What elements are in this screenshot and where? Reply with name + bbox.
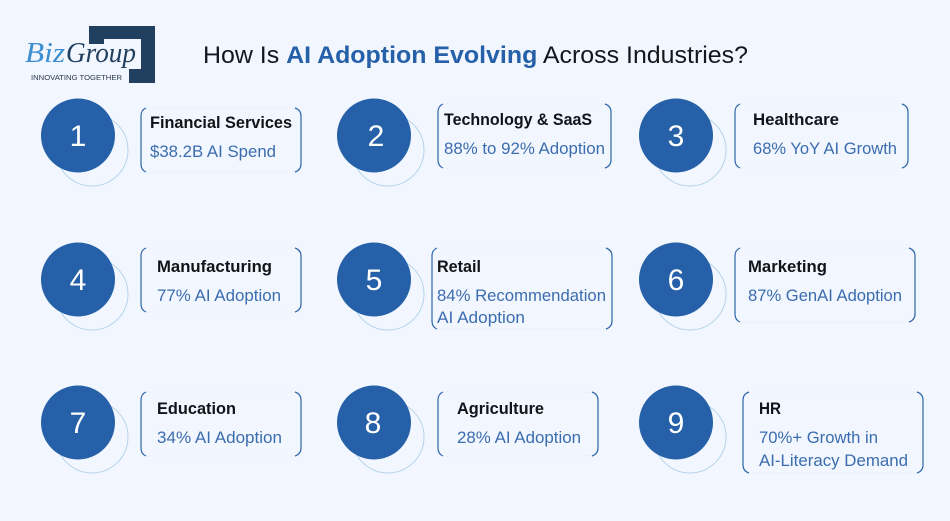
item 9: HR	[639, 386, 923, 473]
item 5: Retail: AI Adoption	[437, 309, 525, 327]
item 3: Healthcare: Healthcare	[753, 111, 839, 129]
item 1: Financial Services: 1	[70, 120, 86, 153]
logo: BizGroup	[25, 26, 155, 83]
item 1: Financial Services	[41, 98, 301, 186]
item 5: Retail: 84% Recommendation	[437, 287, 606, 305]
item 2: Technology & SaaS: 2	[368, 120, 384, 153]
item 2: Technology & SaaS: 88% to 92% Adoption	[444, 140, 605, 158]
title: How Is AI Adoption Evolving Across Industries?	[203, 42, 748, 69]
item 7: Education: 34% AI Adoption	[157, 429, 282, 447]
item 8: Agriculture: 8	[365, 407, 381, 440]
item 3: Healthcare: 68% YoY AI Growth	[753, 140, 897, 158]
item 9: HR: 70%+ Growth in	[759, 429, 878, 447]
item 8: Agriculture: Agriculture	[457, 400, 544, 418]
item 2: Technology & SaaS	[337, 98, 611, 186]
item 2: Technology & SaaS: Technology & SaaS	[444, 111, 592, 129]
logo: BizGroup: Group	[66, 37, 136, 69]
item 4: Manufacturing: 77% AI Adoption	[157, 287, 281, 305]
item 3: Healthcare: 3	[668, 120, 684, 153]
item 9: HR: AI-Literacy Demand	[759, 452, 908, 470]
logo: BizGroup: Biz	[25, 37, 65, 69]
item 8: Agriculture: 28% AI Adoption	[457, 429, 581, 447]
item 7: Education: Education	[157, 400, 236, 418]
item 1: Financial Services: Financial Services	[150, 114, 292, 132]
item 9: HR: HR	[759, 400, 781, 418]
item 4: Manufacturing	[41, 242, 301, 330]
item 8: Agriculture	[337, 386, 598, 473]
item 6: Marketing	[639, 242, 915, 330]
item 6: Marketing: Marketing	[748, 258, 827, 276]
item 5: Retail: Retail	[437, 258, 481, 276]
item 3: Healthcare	[639, 98, 908, 186]
item 4: Manufacturing: Manufacturing	[157, 258, 272, 276]
item 1: Financial Services: $38.2B AI Spend	[150, 143, 276, 161]
item 9: HR: 9	[668, 407, 684, 440]
item 6: Marketing: 6	[668, 264, 684, 297]
item 7: Education: 7	[70, 407, 86, 440]
item 5: Retail	[337, 242, 612, 330]
item 5: Retail: 5	[366, 264, 382, 297]
item 7: Education	[41, 386, 301, 473]
item 6: Marketing: 87% GenAI Adoption	[748, 287, 902, 305]
item 4: Manufacturing: 4	[70, 264, 86, 297]
logo: BizGroup: INNOVATING TOGETHER	[31, 73, 123, 82]
